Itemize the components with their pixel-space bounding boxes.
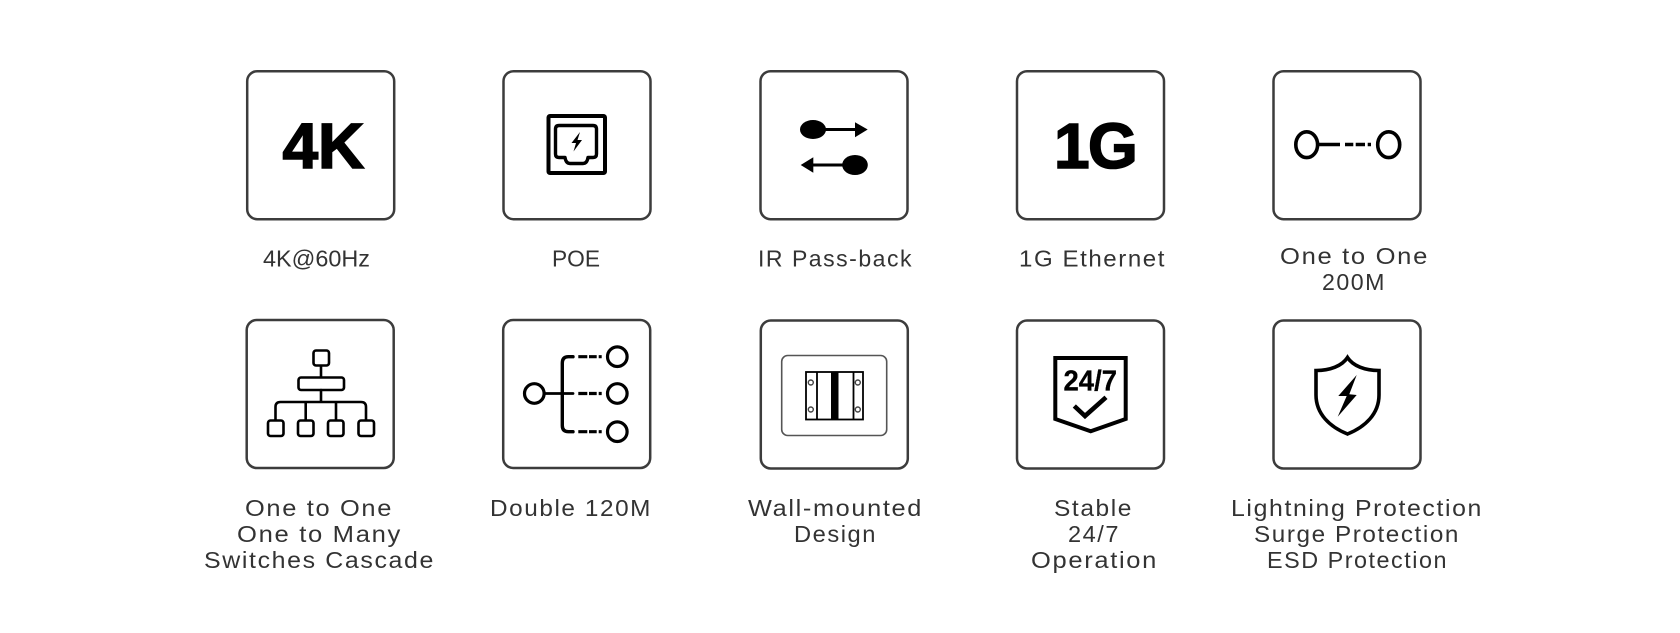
label line 3: Operation [1031,547,1158,573]
icon box [503,320,650,468]
icon: lightning shield [1316,358,1379,434]
label: 4K@60Hz [263,246,370,272]
icon box [1274,320,1420,468]
label: 1G Ethernet [1019,246,1166,272]
icon box [761,320,908,468]
icon box [1017,320,1164,468]
label line 1: Lightning Protection [1231,495,1483,521]
panel: One to One 200M [1274,71,1429,295]
panel: POE [504,71,650,272]
label line 2: Design [794,521,877,547]
icon: point-to-point link [1296,132,1400,158]
panel: 4K@60Hz [247,71,394,272]
icon: 1G: 1G [1054,110,1138,182]
label line 3: Switches Cascade [204,547,435,573]
icon: wall mounted device [782,356,887,436]
label: One to One [1280,243,1429,269]
label line 1: Wall-mounted [748,495,923,521]
panel: Wall-mounted Design [748,320,923,547]
panel: Double 120M [490,320,652,521]
panel: Stable 24/7 Operation [1017,320,1164,573]
icon: one to three branches [524,347,627,442]
panel: 1G Ethernet [1017,71,1166,272]
label line 2: Surge Protection [1254,521,1460,547]
panel: One to One, One to Many, Switches Cascade [204,320,435,573]
label line 2: 200M [1322,269,1386,295]
panel: Lightning, Surge, ESD Protection [1231,320,1483,573]
icon: 24/7 shield: 24/7 [1064,365,1117,397]
icon: two-way arrows [800,120,868,175]
icon: 4K: 4K [282,110,364,182]
icon: 24/7 shield [1055,358,1126,431]
label: IR Pass-back [758,246,913,272]
label: Double 120M [490,495,652,521]
label line 1: Stable [1054,495,1133,521]
icon box [247,71,394,219]
icon box [760,71,908,219]
label: POE [552,246,600,272]
label line 2: 24/7 [1068,521,1120,547]
icon box [504,71,650,219]
panel: IR Pass-back [758,71,913,272]
icon box [247,320,394,468]
label line 3: ESD Protection [1267,547,1448,573]
label line 1: One to One [245,495,393,521]
icon: network tree [268,350,374,436]
icon: powered ethernet port [548,116,605,173]
label line 2: One to Many [237,521,402,547]
icon box [1274,71,1420,219]
icon box [1017,71,1164,219]
